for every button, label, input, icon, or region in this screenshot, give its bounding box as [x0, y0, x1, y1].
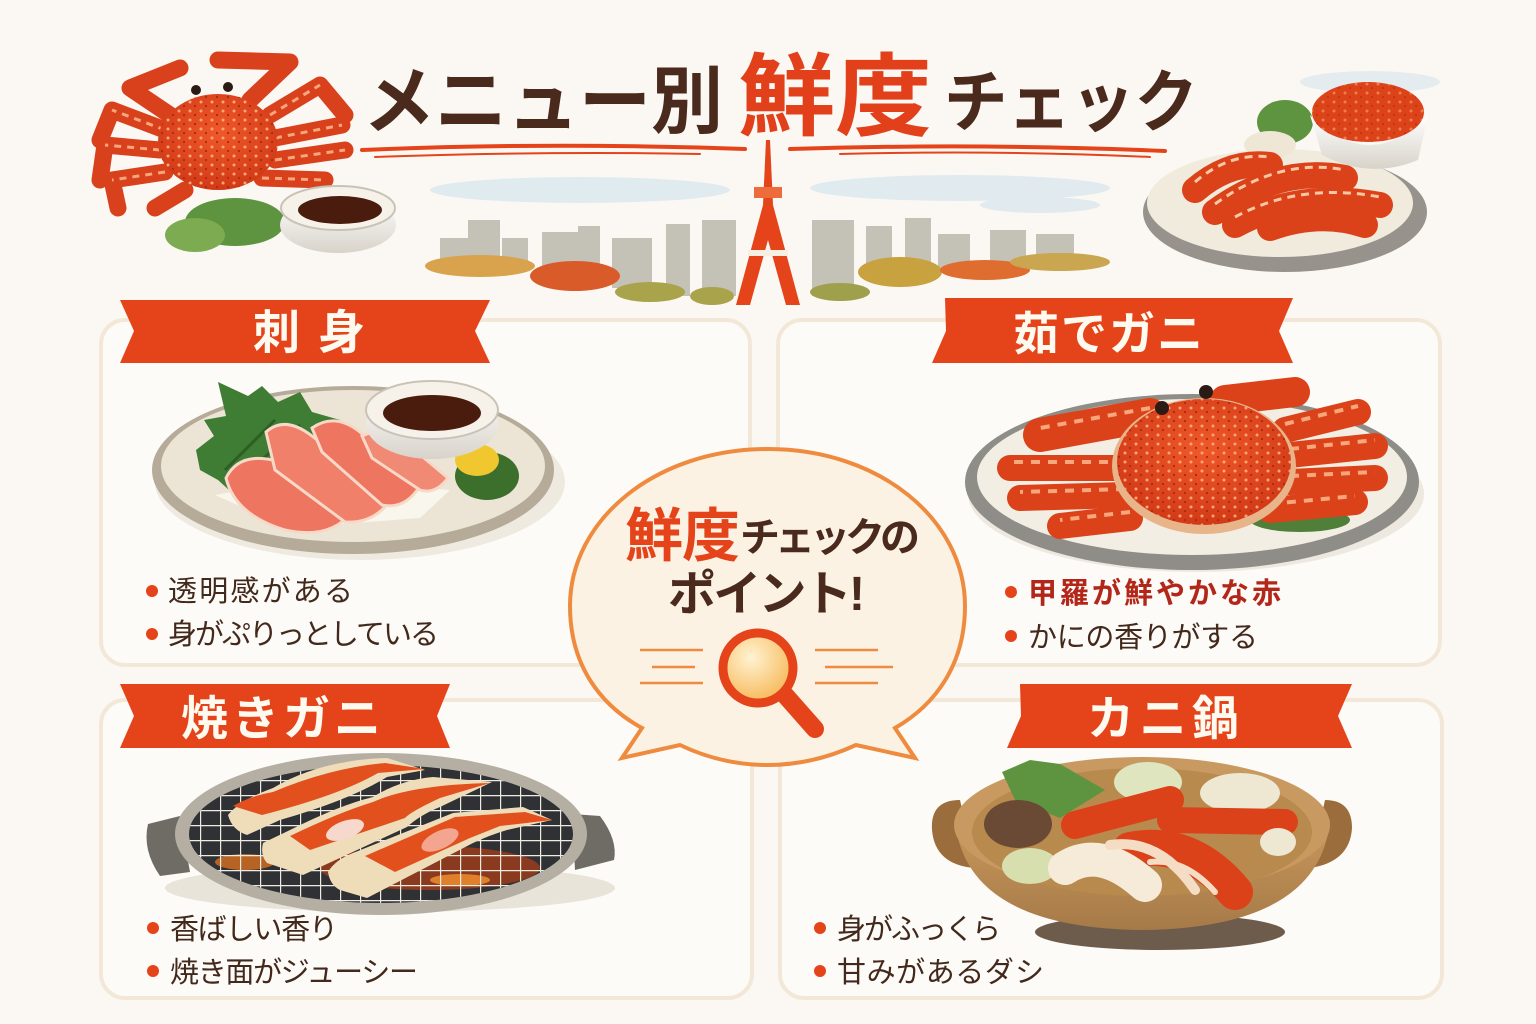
ribbon: grilled crab heading	[120, 684, 450, 748]
ribbon: hot pot heading: カニ鍋	[1087, 692, 1239, 745]
bubble heading: ポイント!	[668, 568, 865, 621]
crab leg one	[228, 758, 425, 835]
bullets: hot pot	[814, 913, 1044, 989]
illustration: sashimi plate	[152, 381, 565, 560]
illustration: boiled crab plate	[965, 385, 1424, 572]
ribbon: boiled crab heading	[932, 298, 1293, 363]
bullets: grilled crab	[147, 913, 418, 989]
title: メニュー別	[363, 60, 723, 143]
crab leg two	[262, 777, 492, 875]
title underlines	[362, 146, 1165, 157]
bullets: boiled crab: かにの香りがする	[1028, 621, 1258, 654]
bubble heading: 鮮度	[625, 504, 740, 569]
ribbon: hot pot heading	[1007, 684, 1352, 748]
ribbon: boiled crab heading: 茹でガニ	[1013, 308, 1203, 360]
bullets: hot pot: 甘みがあるダシ	[837, 956, 1044, 989]
panel: sashimi	[101, 300, 750, 665]
panel: boiled crab	[778, 298, 1440, 665]
ribbon: sashimi heading	[120, 300, 490, 363]
bubble heading	[625, 504, 920, 621]
bullets: sashimi	[146, 575, 439, 651]
illustration: crab legs plate top right	[1143, 71, 1440, 272]
title	[363, 48, 1198, 148]
panel: grilled crab	[101, 684, 752, 998]
bullets: grilled crab: 香ばしい香り	[170, 913, 338, 946]
illustration: whole crab top left	[100, 60, 345, 208]
illustration: Tokyo skyline	[425, 140, 1110, 305]
title: チェック	[944, 65, 1198, 141]
ribbon: sashimi heading: 刺身	[253, 306, 365, 359]
bullets: sashimi: 身がぷりっとしている	[168, 618, 439, 651]
ribbon: grilled crab heading: 焼きガニ	[181, 692, 381, 745]
crab leg three	[328, 807, 552, 898]
center speech bubble	[570, 449, 965, 765]
bullets: boiled crab	[1005, 576, 1281, 654]
illustration: grilled crab	[146, 748, 615, 915]
bullets: boiled crab: 甲羅が鮮やかな赤	[1028, 576, 1281, 610]
illustration: hot pot	[932, 757, 1352, 950]
icon: magnifying glass	[640, 633, 893, 729]
title: 鮮度	[738, 48, 932, 148]
bubble heading: チェックの	[740, 516, 920, 560]
bullets: sashimi: 透明感がある	[168, 575, 353, 608]
bullets: hot pot: 身がふっくら	[837, 913, 1001, 946]
panel: crab hot pot	[780, 684, 1442, 998]
bullets: grilled crab: 焼き面がジューシー	[170, 956, 418, 989]
illustration: greens and soy sauce	[165, 186, 396, 253]
